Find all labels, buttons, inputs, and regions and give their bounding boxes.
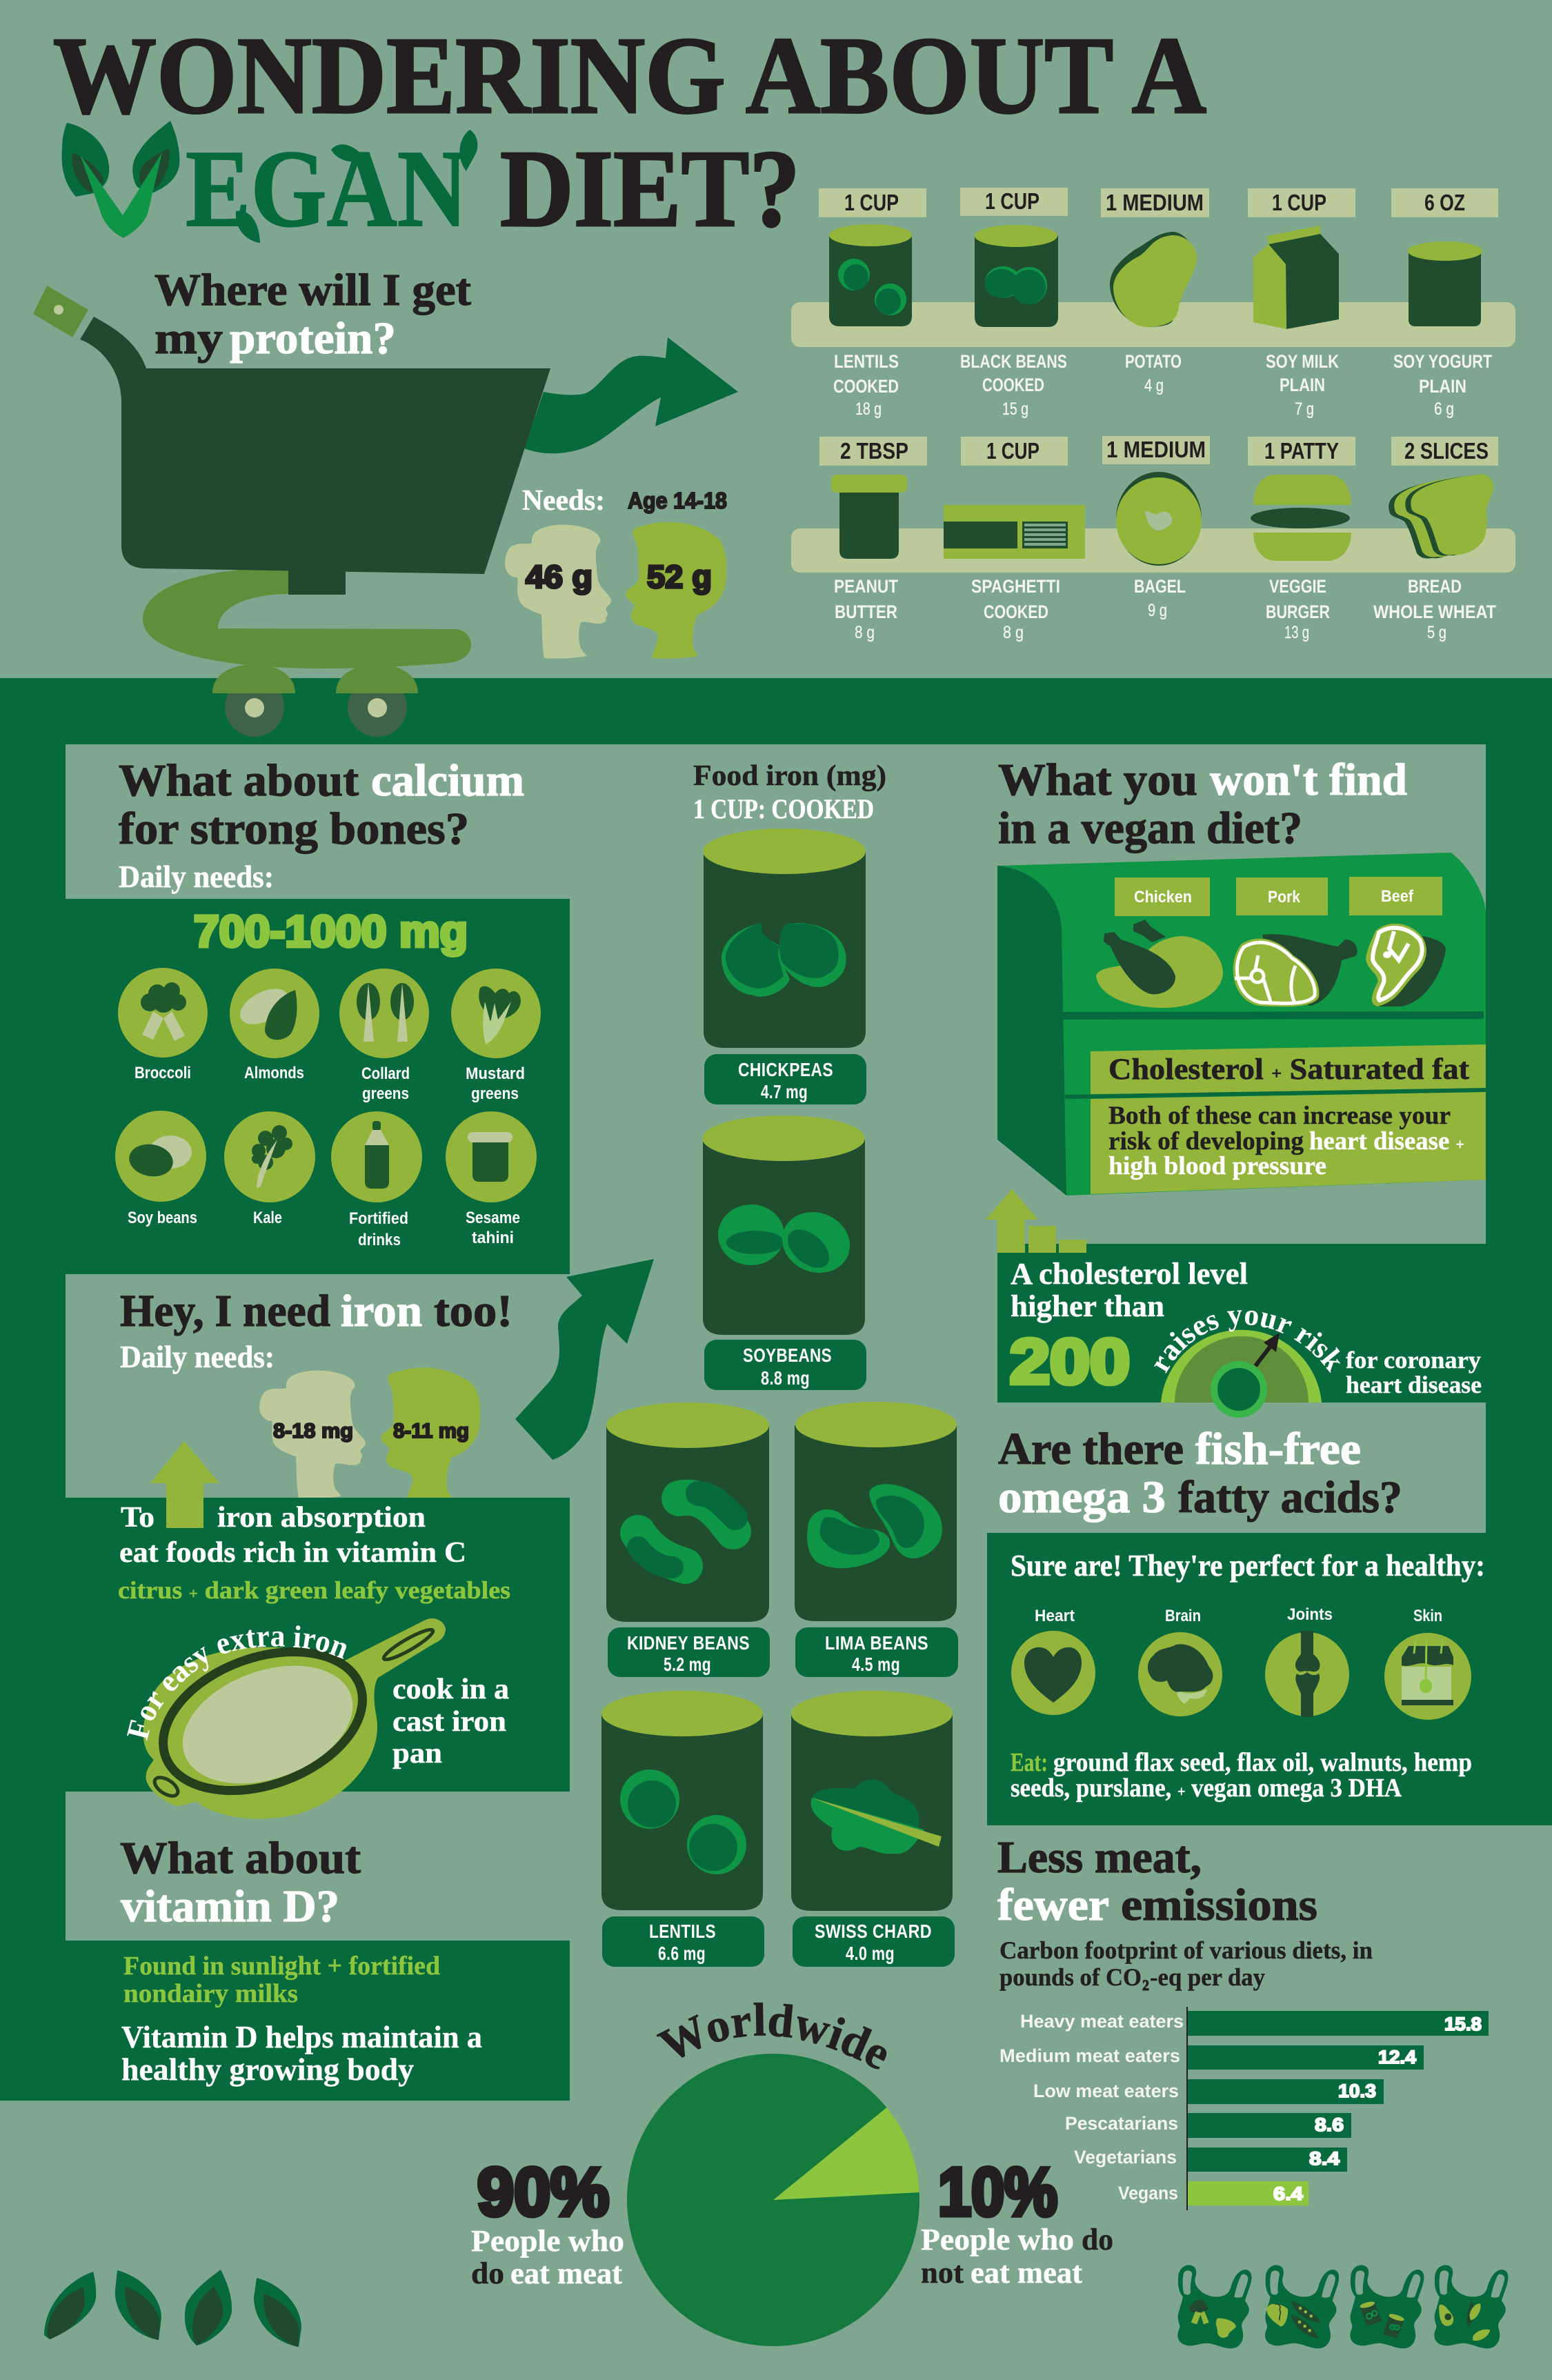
curve guide for gauge text <box>1166 1325 1333 1377</box>
icon: pork <box>1233 934 1357 1006</box>
stat 90 percent: eat meat <box>510 2257 622 2290</box>
iron absorption text: iron absorption <box>217 1502 426 1534</box>
food labels: Mustard <box>466 1064 525 1083</box>
bar labels: Low meat eaters <box>1033 2081 1179 2101</box>
food names row one: PLAIN <box>1280 375 1325 395</box>
risk text: risk of developing <box>1108 1127 1304 1156</box>
iron heading: iron <box>341 1286 422 1336</box>
food labels: Soy beans <box>128 1209 197 1227</box>
coronary text <box>1346 1347 1482 1398</box>
food names row one: LENTILS <box>834 351 899 372</box>
organ labels: Joints <box>1287 1605 1333 1624</box>
calcium heading: for strong bones? <box>119 804 469 854</box>
serving text: 1 MEDIUM <box>1106 190 1204 215</box>
food names row two: PEANUT <box>834 576 898 597</box>
omega subheading: Sure are! They're perfect for a healthy: <box>1011 1549 1485 1583</box>
meat labels: Chicken <box>1134 888 1192 906</box>
food labels: tahini <box>472 1229 514 1247</box>
vitamin D heading: What about <box>120 1833 361 1883</box>
icon: sesame tahini <box>468 1132 513 1182</box>
bar chart <box>999 2007 1489 2210</box>
icon: mustard greens <box>479 986 521 1044</box>
title word vegan: EGAN <box>186 127 468 250</box>
serving labels <box>819 188 1498 466</box>
food names row one: 18 g <box>855 399 882 419</box>
icon: veggie burger <box>1251 475 1351 561</box>
bar labels: Heavy meat eaters <box>1020 2011 1184 2032</box>
omega heading <box>998 1424 1402 1523</box>
risk text: Both of these can increase your <box>1108 1102 1451 1130</box>
food names row one: POTATO <box>1125 351 1182 372</box>
curved gauge text: raises your risk <box>1154 1310 1340 1374</box>
won't find heading: What you <box>998 755 1197 805</box>
bar labels: Medium meat eaters <box>999 2045 1180 2066</box>
serving text: 6 OZ <box>1424 190 1465 215</box>
label: soybeans: 8.8 mg <box>761 1367 810 1389</box>
icon: brain <box>1138 1632 1222 1716</box>
icon: potato <box>1110 232 1197 327</box>
coronary text: for coronary <box>1346 1347 1482 1374</box>
protein heading: my <box>155 313 223 364</box>
can: kidney beans <box>606 1402 769 1622</box>
food names row one: BLACK BEANS <box>960 351 1067 372</box>
food names row two: BAGEL <box>1134 576 1186 597</box>
stat 90 percent: 90% <box>477 2154 609 2230</box>
food iron heading: 1 CUP: COOKED <box>693 793 874 824</box>
vitamin D benefit <box>121 2020 482 2087</box>
iron heading <box>120 1286 513 1336</box>
label: lima beans <box>795 1627 958 1677</box>
label: swiss chard: SWISS CHARD <box>815 1921 932 1942</box>
food circles <box>115 968 541 1202</box>
omega heading: fatty acids? <box>1178 1472 1402 1523</box>
value male: 52 g <box>647 559 712 595</box>
bar values: 10.3 <box>1338 2081 1376 2101</box>
label: swiss chard: 4.0 mg <box>846 1943 895 1964</box>
coronary text: heart disease <box>1346 1371 1482 1398</box>
icon: soy beans <box>126 1136 192 1180</box>
cart wheels <box>225 677 407 737</box>
bar labels: Vegetarians <box>1074 2147 1177 2168</box>
calcium value: 700-1000 mg <box>194 906 468 956</box>
bag avocado and greens <box>1434 2265 1508 2348</box>
iron daily needs: Daily needs: <box>120 1339 275 1374</box>
cast iron text: pan <box>392 1738 442 1769</box>
omega heading: Are there <box>998 1424 1184 1474</box>
cart basket <box>80 317 550 574</box>
title <box>53 14 1206 250</box>
risk text <box>1108 1102 1464 1180</box>
icon: chicken <box>1096 920 1223 1008</box>
bar values: 8.6 <box>1315 2114 1344 2135</box>
emissions heading: emissions <box>1121 1880 1317 1930</box>
serving text <box>840 188 1489 464</box>
vitamin D sources: Found in sunlight + fortified <box>123 1952 440 1981</box>
can: chickpeas <box>703 829 866 1048</box>
food names row two: 9 g <box>1148 601 1167 620</box>
panel: worldwide <box>471 2002 1113 2346</box>
won't find heading <box>998 755 1407 853</box>
serving text: 1 CUP <box>986 438 1039 464</box>
panel: cholesterol level <box>986 1189 1486 1418</box>
bar labels <box>999 2011 1184 2203</box>
bag cans <box>1350 2265 1424 2348</box>
bar labels: Vegans <box>1118 2183 1178 2203</box>
food names row one: SOY YOGURT <box>1393 351 1492 372</box>
icon: cast iron pan <box>143 1618 446 1818</box>
food names row two: BREAD <box>1408 576 1462 597</box>
value 200: 200 <box>1010 1327 1130 1397</box>
emissions heading <box>997 1832 1317 1930</box>
panel: protein foods <box>791 188 1515 642</box>
emissions heading: fewer <box>997 1880 1109 1930</box>
label: soybeans <box>704 1340 866 1390</box>
icon: soy yogurt <box>1408 241 1482 326</box>
cholesterol text: Cholesterol + Saturated fat <box>1108 1053 1470 1086</box>
food labels: drinks <box>358 1231 401 1249</box>
serving text: 2 SLICES <box>1404 438 1489 464</box>
cast iron text <box>392 1674 509 1769</box>
icon: broccoli <box>141 982 186 1041</box>
emissions subtitle: Carbon footprint of various diets, in <box>999 1936 1373 1964</box>
panel: food iron cans <box>601 760 958 1967</box>
green section backdrop <box>0 678 1552 2101</box>
curve guide for worldwide text <box>670 2036 891 2078</box>
cart wheel guards <box>212 664 418 693</box>
food labels: Broccoli <box>135 1064 191 1082</box>
cart frame <box>143 568 471 668</box>
food names row two: 8 g <box>1003 623 1024 642</box>
male head iron <box>381 1368 480 1500</box>
emissions heading: Less meat, <box>997 1832 1202 1883</box>
bar values: 6.4 <box>1273 2183 1303 2204</box>
icon: bread slices <box>1389 474 1493 559</box>
protein heading: Where will I get <box>155 265 471 315</box>
icon: heart <box>1011 1631 1095 1715</box>
calcium dark box <box>0 899 570 1274</box>
serving text: 1 CUP <box>844 190 899 215</box>
title line one: WONDERING ABOUT A <box>53 14 1206 137</box>
food names row two: BUTTER <box>835 602 897 622</box>
cholesterol statement: higher than <box>1011 1289 1164 1323</box>
vitamin D benefit: Vitamin D helps maintain a <box>121 2020 482 2054</box>
organ labels: Brain <box>1165 1607 1201 1625</box>
label needs: Needs: <box>522 485 605 517</box>
cholesterol statement <box>1011 1257 1248 1323</box>
meat labels: Beef <box>1381 887 1414 906</box>
pie chart <box>627 2054 919 2346</box>
protein heading: protein? <box>230 313 396 364</box>
risk text: high blood pressure <box>1108 1152 1326 1180</box>
cast iron text: cook in a <box>392 1674 509 1705</box>
food names row two: 5 g <box>1427 623 1446 642</box>
display case <box>997 853 1486 1196</box>
food names row two: BURGER <box>1266 602 1330 622</box>
value female: 46 g <box>526 559 593 595</box>
iron absorption text: To <box>121 1502 155 1534</box>
food names row one: COOKED <box>982 375 1044 395</box>
icon: spaghetti box <box>944 505 1085 559</box>
omega heading: omega 3 <box>998 1472 1166 1523</box>
iron absorption text <box>119 1502 466 1569</box>
stat 10 percent: People who <box>921 2223 1074 2257</box>
food labels: Sesame <box>466 1209 520 1227</box>
label: soybeans: SOYBEANS <box>743 1345 832 1366</box>
icon: leaf V <box>62 121 179 238</box>
omega sources: ground flax seed, flax oil, walnuts, hemp <box>1053 1748 1472 1777</box>
icon: peanut butter jar <box>831 475 907 559</box>
title word diet: DIET? <box>500 127 800 250</box>
stat 90 percent: do <box>471 2257 504 2290</box>
food labels: Kale <box>253 1209 282 1227</box>
food names row one: 15 g <box>1002 399 1028 419</box>
panel: calcium <box>0 755 570 1274</box>
bag broccoli and potato <box>1177 2265 1251 2348</box>
food names row two: SPAGHETTI <box>971 576 1060 597</box>
food names row one: 6 g <box>1434 399 1454 419</box>
hide heads below panel edge <box>248 1498 490 1525</box>
icon: black beans can <box>975 225 1058 327</box>
bars <box>1188 2011 1489 2205</box>
omega sources: seeds, purslane, + vegan omega 3 DHA <box>1011 1774 1402 1803</box>
label: kidney beans <box>608 1627 770 1677</box>
leaf accents on vegan <box>236 130 477 243</box>
label: chickpeas: CHICKPEAS <box>738 1059 833 1080</box>
omega sources <box>1011 1748 1472 1803</box>
vitamin D dark box <box>0 1941 570 2101</box>
cast iron text: cast iron <box>392 1706 506 1738</box>
serving text: 1 CUP <box>985 188 1039 214</box>
vitamin D benefit: healthy growing body <box>121 2052 414 2087</box>
won't find heading: in a vegan diet? <box>998 803 1302 853</box>
cart handle <box>33 286 88 337</box>
food names row two <box>834 576 1496 642</box>
female head iron <box>259 1370 366 1498</box>
stat 10 percent: 10% <box>938 2154 1057 2230</box>
label: lima beans: 4.5 mg <box>852 1654 900 1675</box>
cholesterol statement: A cholesterol level <box>1011 1257 1248 1291</box>
food iron heading <box>693 760 886 824</box>
icon: lentils can <box>829 224 912 326</box>
can: lima beans <box>795 1402 957 1621</box>
shelves <box>791 302 1515 573</box>
food names row two: 8 g <box>855 623 875 642</box>
arrow: increase <box>150 1441 219 1528</box>
organ labels <box>1035 1605 1442 1625</box>
label age: Age 14-18 <box>628 488 727 513</box>
calcium heading <box>119 755 524 854</box>
label: chickpeas: 4.7 mg <box>761 1081 808 1102</box>
iron values: 8-11 mg <box>393 1420 469 1442</box>
emissions subtitle: 2 <box>1142 1976 1149 1994</box>
bar values: 12.4 <box>1378 2047 1416 2067</box>
food names row two: COOKED <box>984 602 1048 622</box>
protein heading <box>155 265 471 364</box>
stat 10 percent <box>921 2154 1113 2290</box>
can: soybeans <box>702 1115 865 1335</box>
axis <box>1186 2007 1188 2210</box>
icon: beef <box>1366 924 1446 1006</box>
omega sources: Eat: <box>1011 1748 1048 1777</box>
iron values: 8-18 mg <box>273 1420 353 1442</box>
calcium daily needs: Daily needs: <box>119 859 274 894</box>
cart stem <box>288 566 346 595</box>
icon: almonds <box>235 982 297 1040</box>
vitamin D heading: vitamin D? <box>121 1881 339 1932</box>
food labels: greens <box>471 1084 519 1103</box>
icon: gauge <box>1161 1330 1322 1414</box>
panel: iron <box>66 1286 570 1818</box>
label: swiss chard <box>793 1916 955 1967</box>
bar values <box>1273 2014 1482 2204</box>
calcium heading: calcium <box>371 755 524 806</box>
iron values <box>273 1420 469 1442</box>
meat labels <box>1115 877 1442 916</box>
iron dark box <box>0 1498 570 1792</box>
food names row one: COOKED <box>833 376 899 397</box>
serving text: 1 CUP <box>1272 190 1326 215</box>
icon: collard greens <box>357 983 414 1042</box>
stat 10 percent: not <box>921 2256 964 2290</box>
panel: emissions <box>997 1832 1489 2210</box>
stat 10 percent: do <box>1082 2223 1113 2257</box>
label: lentils: 6.6 mg <box>658 1943 706 1964</box>
food names row one: PLAIN <box>1419 376 1466 397</box>
label: kidney beans: 5.2 mg <box>664 1654 711 1675</box>
arrow: to protein foods <box>524 337 738 453</box>
icon: leaves <box>44 2270 301 2347</box>
food iron heading: Food iron (mg) <box>693 760 886 792</box>
stat 10 percent: eat meat <box>971 2256 1082 2290</box>
female head <box>505 524 611 659</box>
cholesterol dark box <box>997 1244 1486 1402</box>
label: lentils: LENTILS <box>649 1921 716 1942</box>
food names row two: 13 g <box>1284 623 1309 642</box>
food names row one: SOY MILK <box>1266 351 1339 372</box>
food labels: greens <box>362 1084 409 1103</box>
bar values: 15.8 <box>1444 2014 1482 2034</box>
icon: kale <box>252 1125 292 1188</box>
iron heading: Hey, I need <box>120 1286 330 1336</box>
icon: rising bars arrow <box>986 1189 1086 1253</box>
food names row two: WHOLE WHEAT <box>1373 602 1496 622</box>
vitamin c sources: citrus + dark green leafy vegetables <box>118 1576 510 1604</box>
protein needs <box>505 485 727 659</box>
risk text: heart disease + <box>1309 1127 1464 1156</box>
label: chickpeas <box>704 1054 866 1104</box>
icon: bagel <box>1116 472 1202 566</box>
won't find heading: won't find <box>1210 755 1407 805</box>
icon: fortified drink <box>365 1121 389 1189</box>
bag greens and peas <box>1265 2265 1339 2348</box>
label: lima beans: LIMA BEANS <box>825 1632 928 1654</box>
omega heading: fish-free <box>1195 1424 1361 1474</box>
food names row two: VEGGIE <box>1269 576 1326 597</box>
arrow: to iron foods <box>515 1259 654 1460</box>
omega dark box <box>987 1533 1486 1825</box>
emissions subtitle: pounds of CO <box>999 1963 1142 1991</box>
food names row one: 7 g <box>1295 399 1314 419</box>
food labels: Collard <box>361 1064 410 1083</box>
vitamin D heading <box>120 1833 361 1932</box>
bar labels: Pescatarians <box>1065 2113 1178 2134</box>
vitamin D sources <box>123 1952 440 2008</box>
food labels: Almonds <box>244 1064 304 1082</box>
label: kidney beans: KIDNEY BEANS <box>627 1632 750 1654</box>
icon: shopping cart <box>33 286 550 737</box>
food names row one <box>833 351 1492 419</box>
can: lentils <box>601 1691 763 1910</box>
male head <box>626 522 726 659</box>
organ labels: Heart <box>1035 1607 1075 1625</box>
panel: omega 3 <box>987 1424 1486 1825</box>
curved worldwide text: Worldwide <box>657 2002 887 2070</box>
curve guide for pan text <box>148 1647 355 1741</box>
iron heading: too! <box>434 1286 513 1336</box>
serving text: 2 TBSP <box>840 438 908 464</box>
food labels <box>128 1064 525 1249</box>
serving text: 1 PATTY <box>1264 438 1339 464</box>
iron absorption text: eat foods rich in vitamin C <box>119 1537 466 1569</box>
curved pan text: For easy extra iron <box>127 1625 346 1741</box>
stat 90 percent: People who <box>471 2224 624 2258</box>
stat 90 percent <box>471 2154 624 2290</box>
label: lentils <box>602 1916 764 1967</box>
can: swiss chard <box>791 1691 953 1911</box>
icon: grocery bags <box>1177 2265 1508 2348</box>
panel: vitamin D <box>0 1833 570 2101</box>
emissions subtitle: -eq per day <box>1150 1963 1265 1991</box>
food labels: Fortified <box>349 1209 408 1228</box>
icon: joint <box>1265 1631 1349 1717</box>
vitamin D sources: nondairy milks <box>123 1979 298 2008</box>
icon: soy milk carton <box>1253 226 1339 329</box>
organ labels: Skin <box>1413 1607 1442 1625</box>
food names row one: 4 g <box>1144 376 1164 395</box>
calcium heading: What about <box>119 755 359 806</box>
icon: skin <box>1384 1633 1471 1720</box>
emissions subtitle <box>999 1936 1373 1994</box>
serving text: 1 MEDIUM <box>1106 437 1206 462</box>
meat labels: Pork <box>1268 888 1301 906</box>
panel: what you won't find <box>997 755 1486 1196</box>
bar values: 8.4 <box>1309 2148 1340 2169</box>
